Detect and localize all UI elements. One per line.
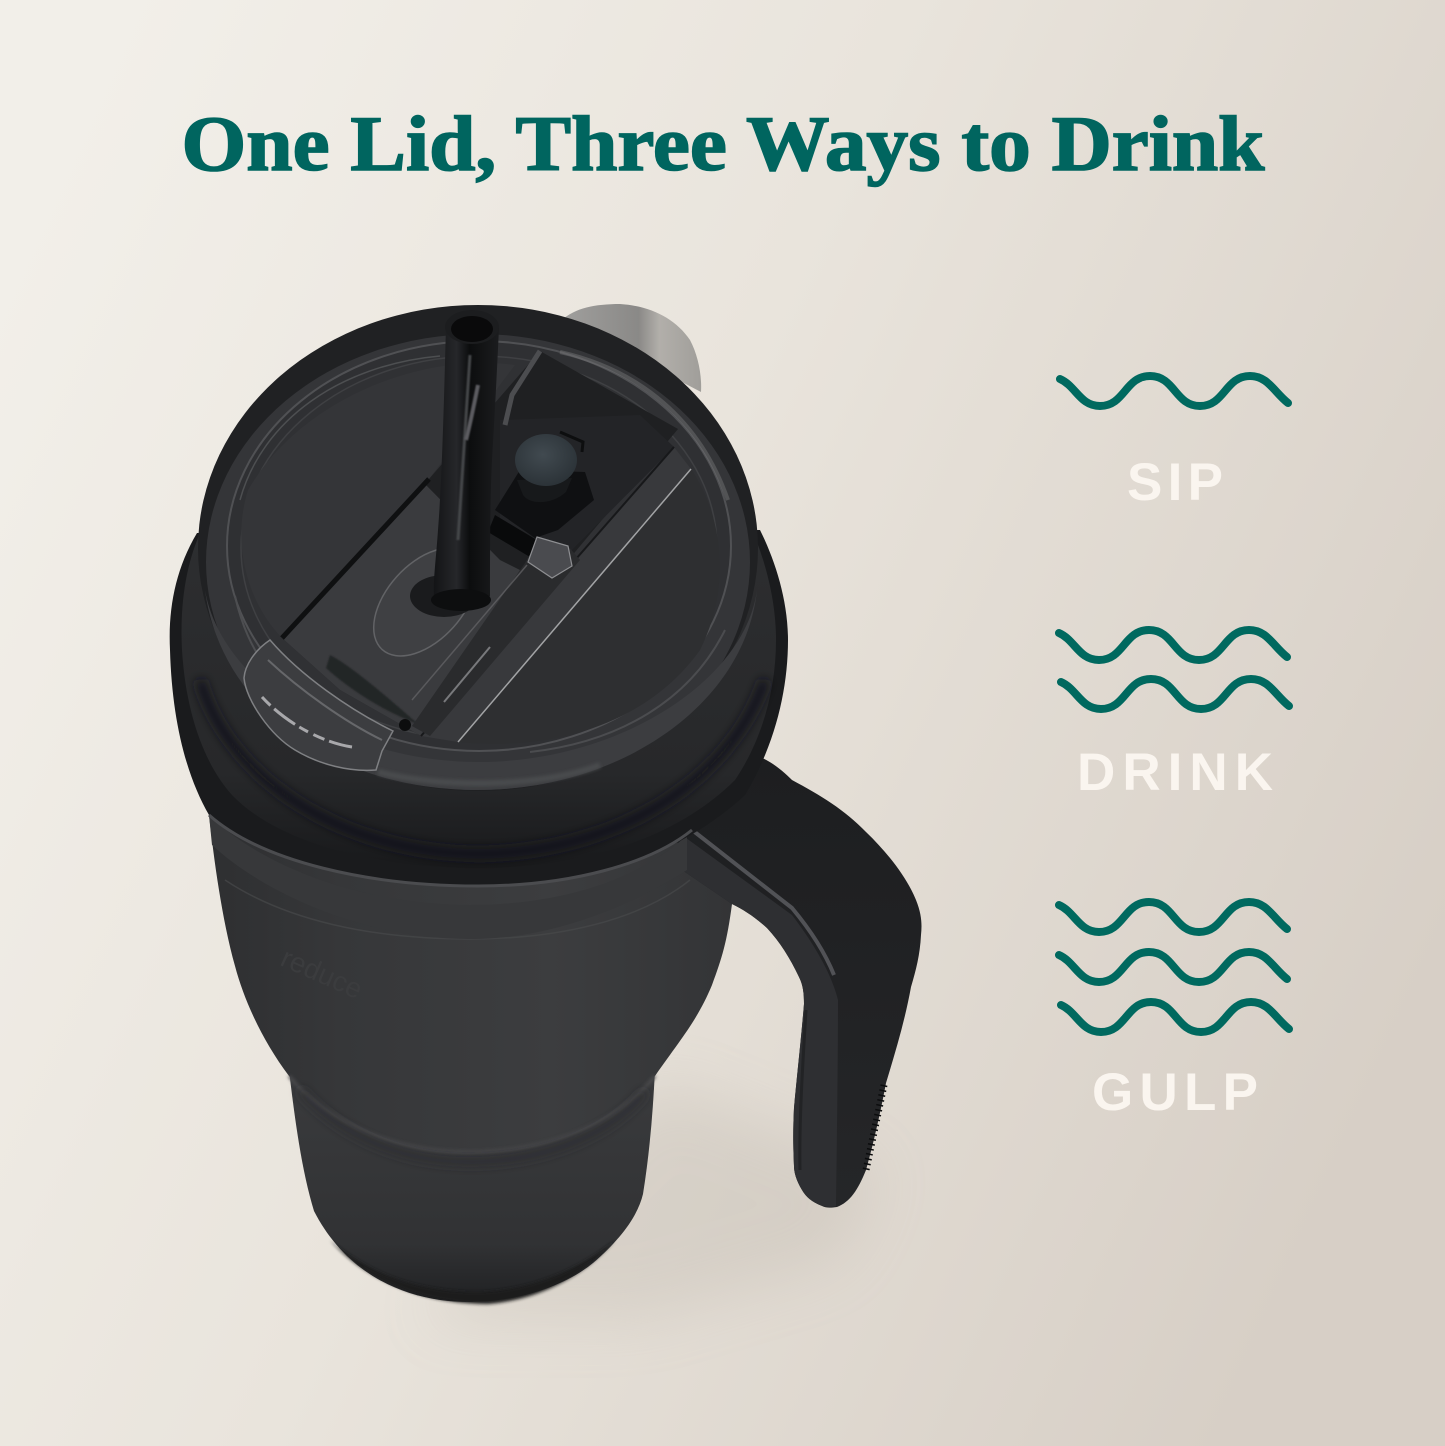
gulp indicator (1059, 902, 1289, 1122)
label: sip: SIP (1127, 453, 1223, 512)
sip indicator (1060, 376, 1288, 512)
sliding glass bar (412, 537, 580, 736)
soft shadow (420, 1080, 880, 1320)
tumbler lower body (289, 1070, 655, 1304)
handle (677, 755, 921, 1208)
straw (431, 310, 499, 611)
front flip tab (244, 640, 411, 770)
lid centre channel (282, 351, 691, 742)
tumbler upper body (209, 800, 735, 1162)
lid right panel (458, 469, 720, 744)
tumbler illustration (170, 304, 1289, 1320)
mouthpiece recess (354, 529, 496, 675)
icon: one wave (1060, 376, 1288, 406)
label: drink: DRINK (1077, 743, 1273, 802)
embossed logo on body: reduce (276, 942, 367, 1005)
plug button (515, 432, 583, 502)
drink indicator (1059, 630, 1289, 802)
tumbler collar and lid base (170, 530, 788, 939)
icon: two waves (1059, 630, 1289, 709)
lid left panel (241, 363, 515, 638)
plug base and t-bar (488, 470, 594, 560)
icon: three waves (1059, 902, 1289, 1032)
lid pull tab (562, 304, 701, 392)
label: gulp: GULP (1092, 1063, 1258, 1122)
clear lid (198, 305, 758, 791)
title: One Lid, Three Ways to Drink (182, 100, 1265, 187)
